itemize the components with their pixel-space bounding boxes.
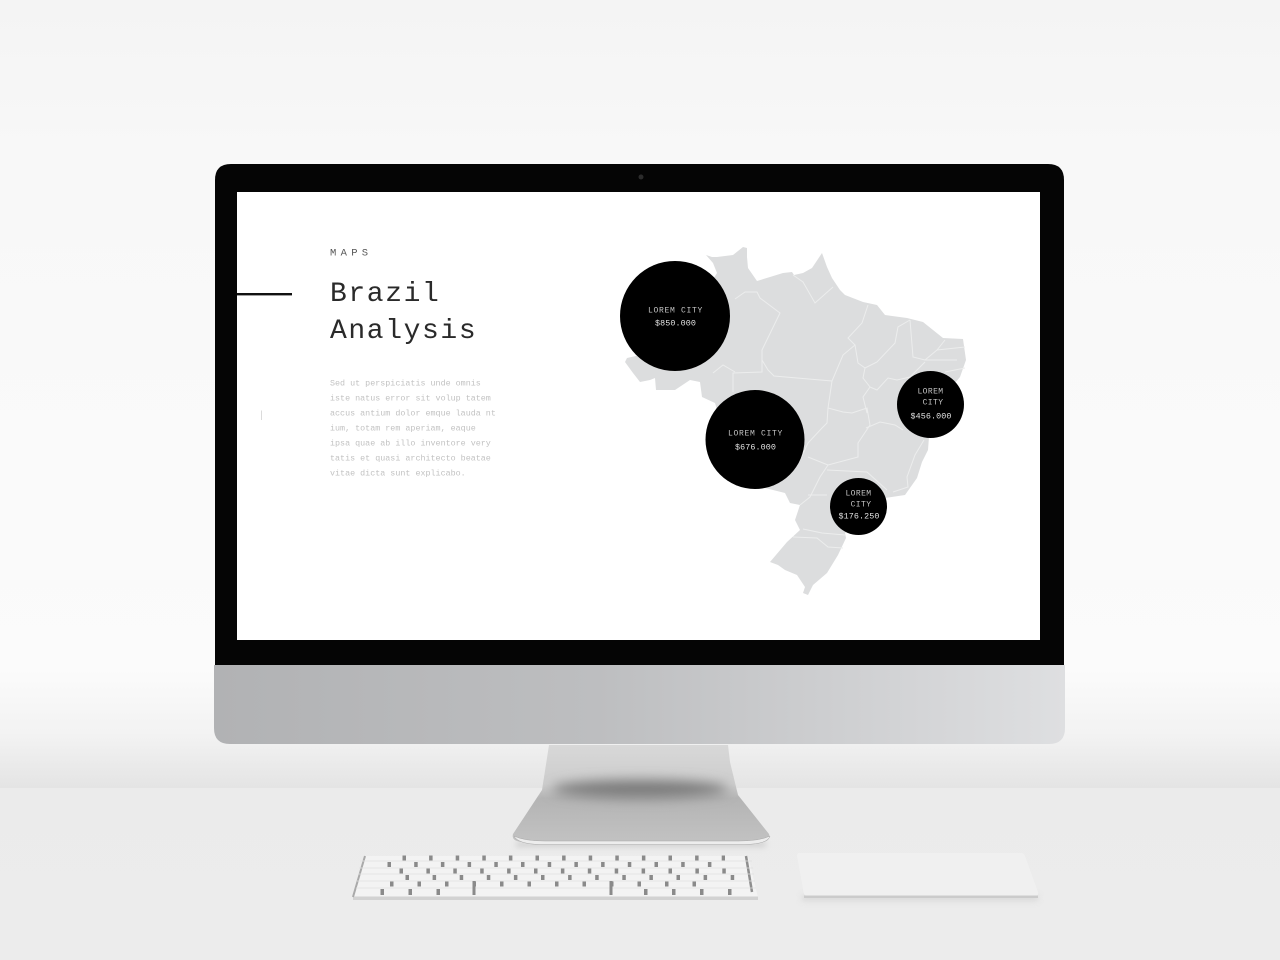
keyboard: [353, 856, 758, 900]
body text: ium, totam rem aperiam, eaque: [330, 424, 476, 434]
body text: Sed ut perspiciatis unde omnis: [330, 378, 481, 388]
accent line: [237, 293, 292, 295]
trackpad: [797, 853, 1038, 901]
bubble: Lorem City $456.000: LOREM: [917, 387, 944, 396]
map of Brazil: [625, 247, 966, 595]
bubble: Lorem City $456.000: CITY: [923, 398, 943, 407]
bubble: Lorem City $850.000: [620, 261, 730, 371]
monitor stand: [513, 745, 770, 847]
webcam: [638, 174, 644, 180]
monitor chin: [214, 665, 1065, 744]
bubble: Lorem City $676.000: $676.000: [735, 442, 776, 452]
eyebrow label: MAPS: [330, 248, 372, 260]
body text: accus antium dolor emque lauda nt: [330, 408, 496, 418]
bubble: Lorem City $850.000: LOREM CITY: [648, 306, 703, 315]
bubble: Lorem City $176.250: LOREM: [845, 489, 872, 498]
bubble: Lorem City $456.000: $456.000: [910, 411, 952, 421]
state borders: [713, 275, 965, 548]
bubble: Lorem City $176.250: [830, 478, 887, 535]
body text: vitae dicta sunt explicabo.: [330, 468, 466, 478]
bubble: Lorem City $176.250: $176.250: [838, 511, 880, 521]
small side marker: |: [258, 410, 265, 422]
body text: iste natus error sit volup tatem: [330, 394, 491, 404]
bubble: Lorem City $456.000: [897, 371, 964, 438]
bubble: Lorem City $676.000: LOREM CITY: [728, 430, 783, 438]
desk surface: [0, 788, 1280, 960]
body text: ipsa quae ab illo inventore very: [330, 438, 491, 448]
screen slide: [237, 192, 1040, 640]
title: Brazil: [330, 279, 440, 310]
title: Analysis: [330, 316, 477, 347]
body text: tatis et quasi architecto beatae: [330, 454, 491, 464]
bubble: Lorem City $676.000: [706, 390, 804, 489]
bubble: Lorem City $176.250: CITY: [851, 500, 871, 509]
bubble: Lorem City $850.000: $850.000: [655, 318, 696, 328]
monitor bezel: [215, 164, 1064, 665]
monitor: [214, 164, 1065, 744]
